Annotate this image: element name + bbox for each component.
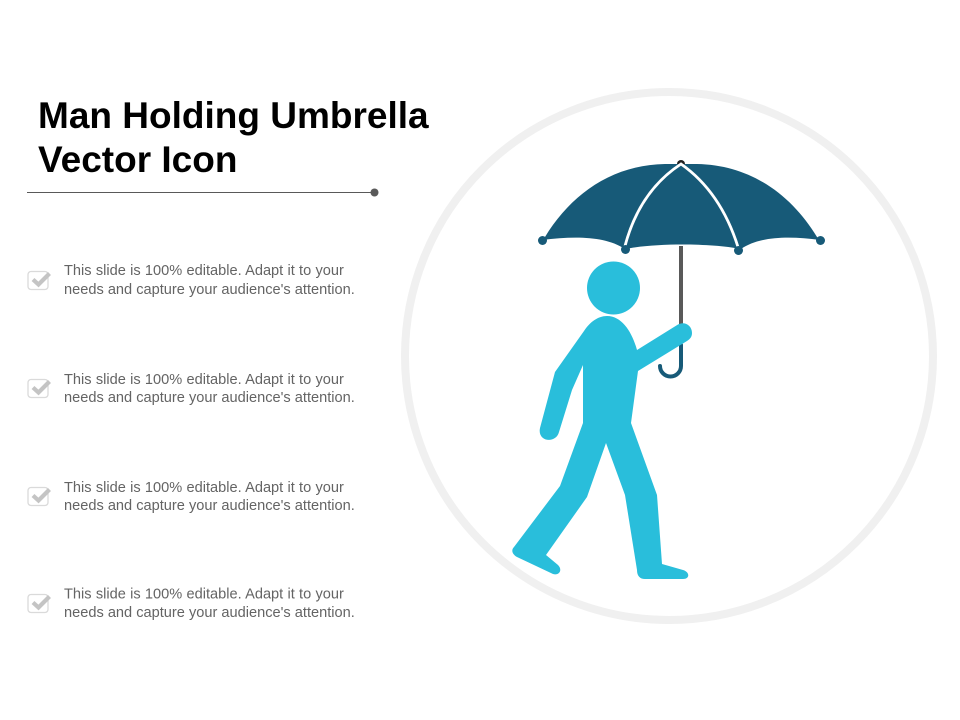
umbrella hook — [660, 345, 681, 376]
text block 2 — [64, 372, 355, 406]
text block 1: This slide is 100% editable. Adapt it to your — [64, 263, 344, 279]
man body — [512, 316, 692, 579]
man head — [587, 262, 640, 314]
text block 3: needs and capture your audience's attention. — [64, 498, 355, 514]
umbrella canopy — [542, 164, 820, 249]
text block 4: This slide is 100% editable. Adapt it to your — [64, 586, 344, 602]
ring around illustration — [405, 92, 933, 620]
icon: umbrella — [538, 160, 825, 376]
umbrella ribs — [625, 164, 738, 247]
title: Man Holding Umbrella — [38, 95, 429, 136]
umbrella rib tips — [538, 236, 825, 255]
title: Vector Icon — [38, 139, 237, 180]
item 1: check and text — [28, 263, 355, 298]
icon: checkbox 4 — [28, 594, 50, 612]
item 2: check and text — [28, 372, 355, 406]
text block 4: needs and capture your audience's attention. — [64, 605, 355, 621]
icon: checkbox 1 — [28, 272, 50, 290]
text block 1: needs and capture your audience's attention. — [64, 282, 355, 298]
umbrella shaft — [679, 246, 683, 326]
text block 2: This slide is 100% editable. Adapt it to your — [64, 372, 344, 388]
icon: checkbox 2 — [28, 380, 50, 398]
umbrella tip — [677, 160, 685, 168]
text block 1 — [64, 263, 355, 298]
icon: checkbox 3 — [28, 488, 50, 506]
item 4: check and text — [28, 586, 355, 621]
title — [38, 95, 429, 180]
figure: man — [512, 262, 692, 579]
illustration: man holding umbrella — [512, 160, 825, 579]
text block 4 — [64, 586, 355, 621]
title divider with dot — [27, 188, 378, 196]
text block 3 — [64, 480, 355, 514]
text block 3: This slide is 100% editable. Adapt it to your — [64, 480, 344, 496]
item 3: check and text — [28, 480, 355, 514]
text block 2: needs and capture your audience's attention. — [64, 390, 355, 406]
